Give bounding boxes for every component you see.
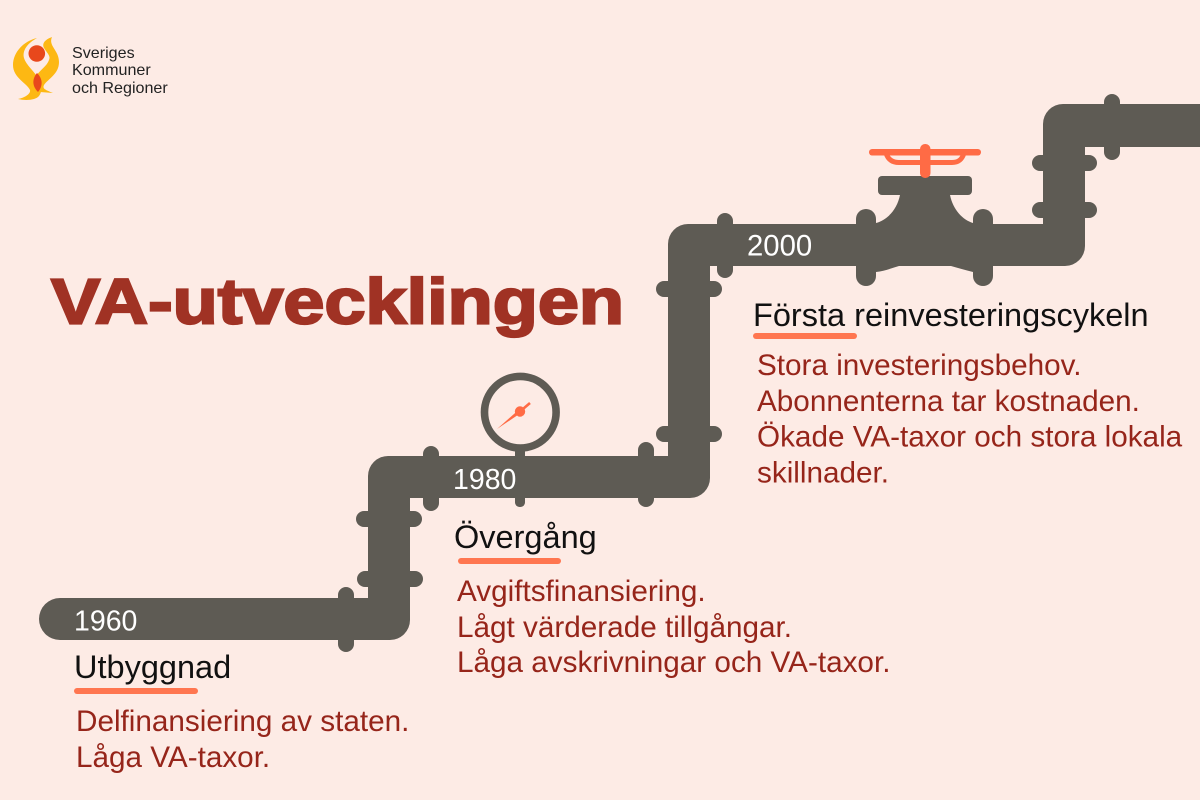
section: Övergång: Lågt värderade tillgångar. (457, 611, 792, 644)
icon: pressure gauge (484, 376, 556, 507)
section: Utbyggnad: Låga VA-taxor. (76, 741, 270, 774)
logo text: Sveriges (72, 44, 135, 62)
logo text (72, 44, 168, 97)
icon: valve (869, 144, 981, 272)
year 1960: 1960 (74, 606, 137, 638)
pipeline (39, 94, 1200, 652)
valve wheel (869, 144, 981, 178)
section: Första reinvesteringscykeln (753, 297, 1183, 490)
section: Första reinvesteringscykeln: Första reinvesteringscykeln (753, 297, 1149, 333)
logo: Sveriges Kommuner och Regioner (13, 37, 168, 100)
section: Utbyggnad (74, 649, 409, 774)
title: VA-utvecklingen (51, 266, 624, 338)
section: Övergång: Låga avskrivningar och VA-taxor. (457, 646, 890, 679)
section: Övergång: Övergång (454, 519, 597, 555)
logo text: och Regioner (72, 79, 168, 97)
section: Utbyggnad: Utbyggnad (74, 649, 231, 685)
year 2000: 2000 (747, 230, 812, 262)
section: Övergång (454, 519, 890, 679)
section: Utbyggnad: Delfinansiering av staten. (76, 705, 409, 738)
section: Första reinvesteringscykeln: Ökade VA-taxor och stora lokala (757, 420, 1183, 454)
section: Första reinvesteringscykeln: Abonnenterna tar kostnaden. (757, 385, 1140, 418)
section: Övergång: Avgiftsfinansiering. (457, 575, 706, 608)
year 1980: 1980 (453, 464, 516, 496)
section: Första reinvesteringscykeln: Stora investeringsbehov. (757, 349, 1082, 382)
logo text: Kommuner (72, 61, 151, 79)
pipe flanges (338, 94, 1120, 652)
pipe body (39, 104, 1200, 640)
section: Första reinvesteringscykeln: skillnader. (757, 456, 889, 490)
logo icon (13, 37, 59, 100)
